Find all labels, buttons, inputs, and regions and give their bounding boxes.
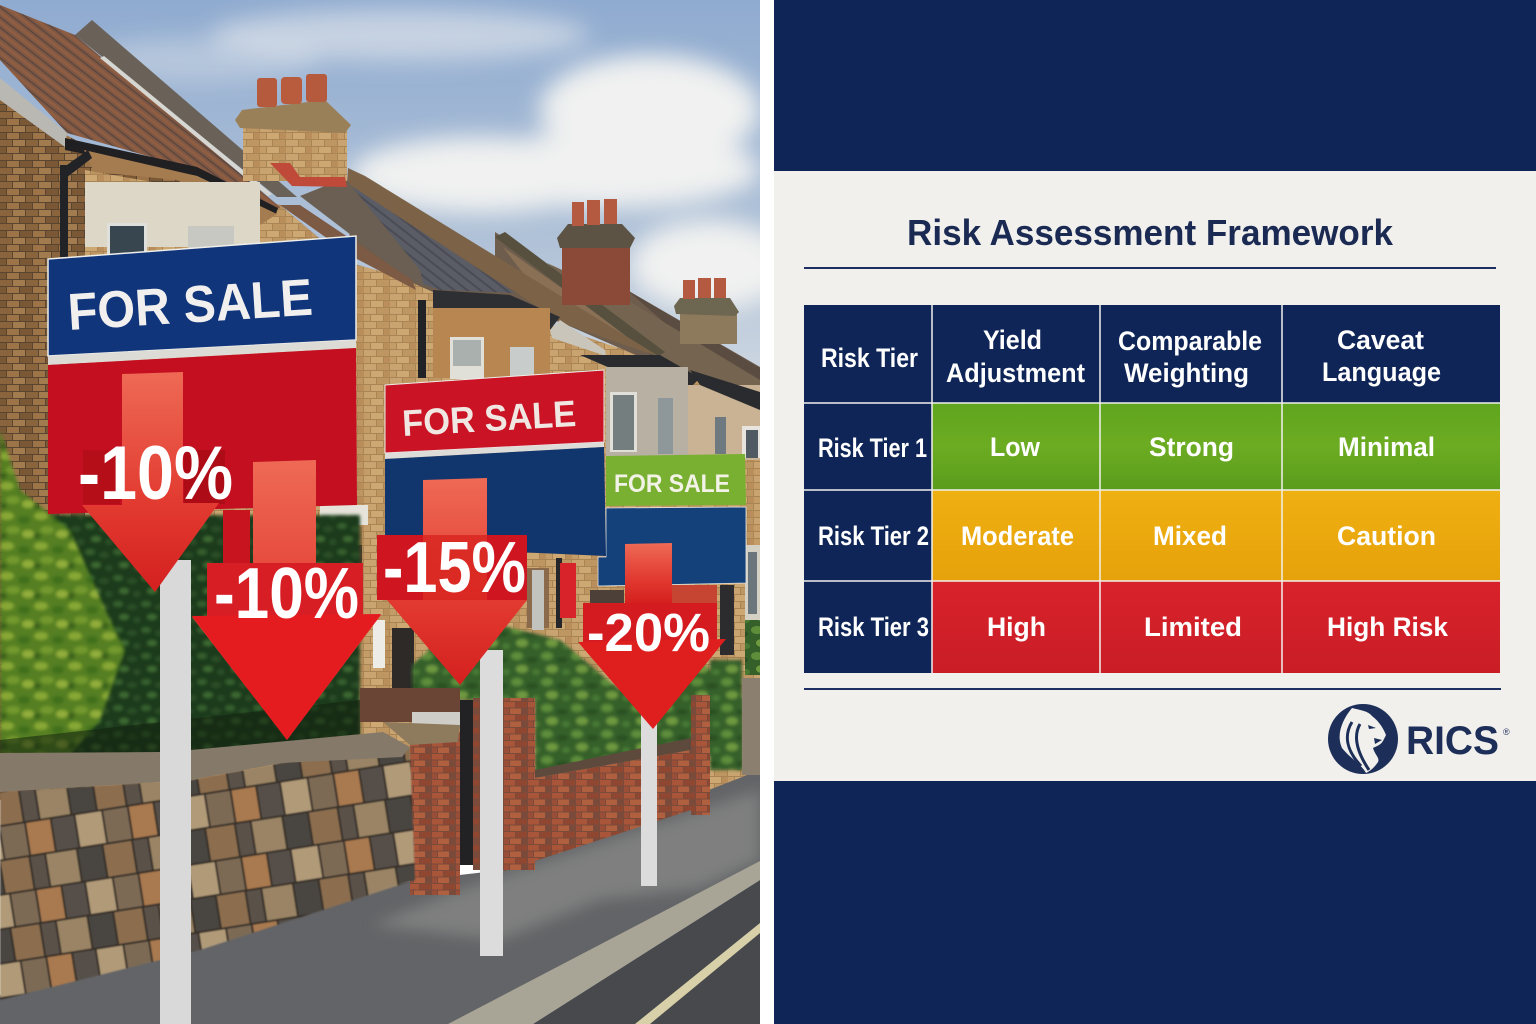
row: risk tier 2: Caution (1337, 521, 1436, 551)
header row: Caveat (1337, 325, 1424, 355)
panel: risk assessment card (774, 171, 1536, 781)
sign posts (160, 560, 657, 1024)
header row: Adjustment (946, 358, 1085, 388)
brick garden walls and gate (360, 688, 710, 895)
row: risk tier 3: Risk Tier 3 (818, 612, 929, 642)
registered mark: ® (1503, 727, 1510, 737)
row: risk tier 3: High (987, 612, 1046, 642)
sign 3: for sale green (598, 454, 746, 586)
row: risk tier 3: High Risk (1327, 612, 1449, 642)
logo: RICS (1328, 704, 1510, 774)
header row (804, 305, 1500, 403)
footer rule (804, 688, 1501, 690)
row: risk tier 1: Risk Tier 1 (818, 433, 927, 463)
header row: Yield (983, 325, 1042, 355)
arrow: minus 20 percent: -20% (587, 603, 710, 663)
icon: lion head (1328, 704, 1398, 774)
sign 1: for sale large: FOR SALE (66, 269, 314, 342)
row: risk tier 2: Moderate (961, 521, 1074, 551)
header row: Weighting (1124, 358, 1249, 388)
sign 2: for sale red (385, 370, 606, 556)
row: risk tier 1: Minimal (1338, 432, 1435, 462)
header row: Comparable (1118, 326, 1262, 356)
chimney 3 (674, 278, 739, 344)
header row: Risk Tier (821, 343, 918, 373)
bay, house two (433, 290, 606, 379)
row: risk tier 2 (804, 490, 1500, 581)
arrow: minus 15 percent (377, 478, 527, 685)
chimney 2 (557, 199, 635, 305)
header row: Language (1322, 357, 1441, 387)
roof: main house (0, 5, 297, 214)
row: risk tier 3: Limited (1144, 612, 1242, 642)
row: risk tier 2: Mixed (1153, 521, 1227, 551)
brick facades (0, 100, 760, 800)
sign 2: for sale red: FOR SALE (401, 393, 577, 444)
row: risk tier 2: Risk Tier 2 (818, 521, 929, 551)
logo wordmark: RICS (1406, 719, 1499, 763)
arrow: minus 10 percent, second: -10% (214, 554, 359, 634)
arrow: minus 10 percent, first: -10% (78, 431, 233, 516)
arrow: minus 10 percent, first (78, 372, 233, 592)
row: risk tier 3 (804, 581, 1500, 673)
lower facade details (318, 505, 760, 688)
row: risk tier 1 (804, 403, 1500, 490)
bay, house three (580, 355, 760, 460)
row: risk tier 1: Strong (1149, 432, 1234, 462)
bay window, main house (84, 150, 277, 256)
sky with clouds (0, 0, 760, 367)
hedges (0, 430, 760, 775)
heading rule (804, 267, 1496, 269)
table: risk tiers (804, 305, 1500, 673)
arrow: minus 20 percent (578, 543, 726, 729)
panel: street photo illustration (0, 0, 790, 1024)
terraced houses (0, 5, 760, 800)
drainpipes (60, 150, 426, 378)
arrow: minus 10 percent, second (192, 460, 381, 740)
row: risk tier 1: Low (990, 432, 1041, 462)
sign 1: for sale large (48, 236, 357, 514)
panel: navy framework background (774, 0, 1536, 1024)
sign 3: for sale green: FOR SALE (614, 470, 730, 498)
roof: right run (280, 168, 760, 400)
chimney 1 (235, 74, 351, 187)
pavement and road (0, 770, 760, 1024)
stone front wall (0, 732, 415, 1000)
heading: Risk Assessment Framework (907, 212, 1394, 253)
arrow: minus 15 percent: -15% (383, 528, 526, 608)
